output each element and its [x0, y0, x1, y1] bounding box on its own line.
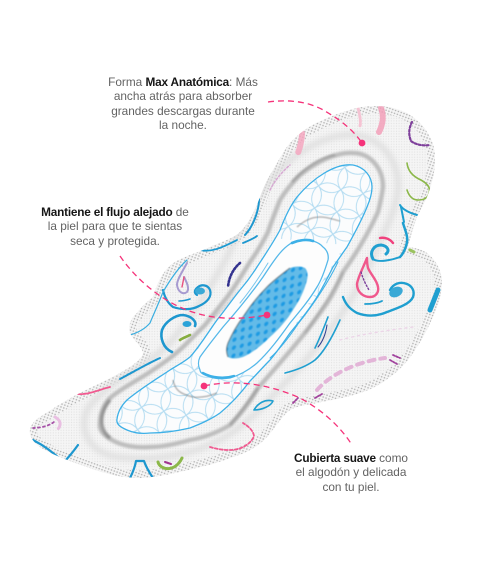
- core area fill: [198, 240, 328, 379]
- gray groove around channel: [100, 153, 383, 447]
- text: cubierta suave: el algodón y delicada: [296, 465, 406, 479]
- top lobe marks: [407, 163, 430, 200]
- inner channel: [117, 165, 372, 433]
- text: cubierta suave: con tu piel.: [322, 480, 380, 494]
- pink lower right: [210, 423, 254, 450]
- text: cubierta suave: Cubierta suave como: [294, 451, 408, 465]
- text: forma max anatomica: [108, 75, 258, 132]
- right wing blue swirls: [254, 205, 438, 410]
- text: forma max anatomica: la noche.: [159, 118, 207, 132]
- channel outline: [117, 165, 372, 433]
- text: mantiene el flujo: seca y protegida.: [70, 234, 160, 248]
- pink left lower: [78, 387, 110, 394]
- crease shadows: [173, 217, 340, 397]
- soft outer ridge shading: [84, 135, 398, 459]
- swirl decorations: [33, 108, 438, 478]
- text: mantiene el flujo: la piel para que te sientas: [48, 219, 182, 233]
- text: forma max anatomica: ancha atrás para absorber: [114, 89, 252, 103]
- flower pattern: [118, 166, 372, 433]
- text: forma max anatomica: grandes descargas durante: [111, 104, 255, 118]
- blue absorbent core: [226, 266, 308, 358]
- pad base fabric: [38, 108, 434, 470]
- clear middle zone of channel: [192, 238, 345, 378]
- pad body: [30, 106, 442, 478]
- lower edge blue tridents: [33, 440, 78, 463]
- illustration: sanitary pad: [30, 106, 442, 478]
- text: forma max anatomica: Forma Max Anatómica: Más: [108, 75, 258, 89]
- text: mantiene el flujo: [41, 205, 189, 248]
- text: cubierta suave: [294, 451, 408, 494]
- left wing swirls: [163, 285, 211, 309]
- dotted pad edge: [30, 106, 442, 478]
- thick arcs on core area: [203, 240, 338, 378]
- text: mantiene el flujo: Mantiene el flujo alejado de: [41, 205, 189, 219]
- pink paisley right: [357, 258, 378, 297]
- left top lobe blue: [245, 199, 259, 235]
- dark groove highlights: [102, 155, 343, 438]
